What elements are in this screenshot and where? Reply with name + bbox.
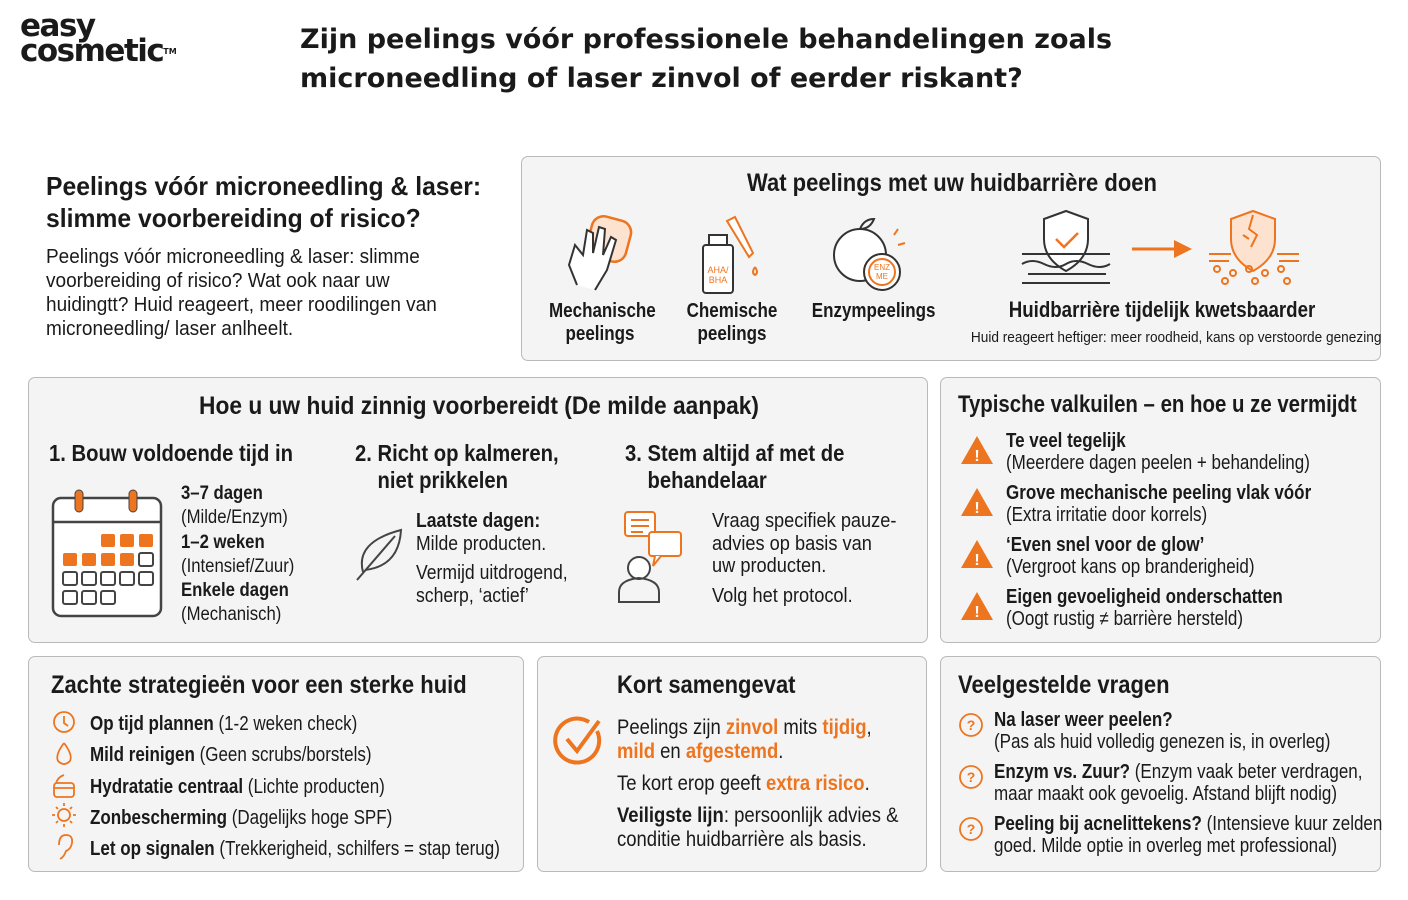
step 2: niet prikkelen [377, 467, 508, 493]
intro heading: slimme voorbereiding of risico? [46, 203, 421, 233]
label chemisch [687, 300, 777, 345]
list: ! [974, 604, 980, 621]
intro text: huidingtt? Huid reageert, meer roodilingen van [46, 294, 437, 316]
step 2 [355, 440, 568, 607]
step 3: behandelaar [647, 467, 767, 493]
label mechanisch: peelings [566, 323, 634, 345]
icon: shield cracked [1209, 210, 1299, 285]
heading: Typische valkuilen – en hoe u ze vermijdt [958, 391, 1357, 418]
intro text: voorbereiding of risico? Wat ook naar uw [46, 270, 390, 292]
list [994, 709, 1330, 753]
intro text: microneedling/ laser anlheelt. [46, 318, 293, 340]
title: microneedling of laser zinvol of eerder riskant? [300, 63, 1023, 94]
panel: voorbereiding [28, 377, 928, 643]
icons [959, 713, 983, 841]
heading: Kort samengevat [617, 671, 796, 699]
logo [20, 8, 177, 69]
text [617, 716, 872, 763]
panel: barrier [521, 156, 1381, 361]
icon: bottle: AHA/ [707, 265, 729, 275]
icon: shield intact [1022, 210, 1110, 284]
icons [52, 711, 76, 860]
step 1 [49, 440, 294, 625]
step 1: 1–2 weken [181, 532, 265, 553]
panel: vragen: maar maakt ook gevoelig. Afstand blijft nodig) [994, 783, 1337, 805]
list [90, 713, 500, 860]
label chemisch: Chemische [687, 300, 777, 322]
label barrier: Huidbarrière tijdelijk kwetsbaarder [1009, 297, 1315, 322]
label enzym: Enzympeelings [812, 300, 936, 322]
list: Eigen gevoeligheid onderschatten [1006, 586, 1283, 608]
logo: cosmeticTM [20, 33, 177, 69]
arrow [1132, 240, 1192, 258]
panel: strategieen [28, 656, 524, 872]
step 2: Milde producten. [416, 533, 546, 555]
list [961, 430, 1311, 630]
step 3: Vraag specifiek pauze- [712, 510, 896, 532]
list: Hydratatie centraal (Lichte producten) [90, 776, 385, 798]
intro heading: Peelings vóór microneedling & laser: [46, 171, 481, 201]
icon: doctor chat [618, 511, 682, 603]
step 2: 2. Richt op kalmeren, [355, 440, 559, 466]
panel: vragen [940, 656, 1381, 872]
step 3 [618, 440, 896, 607]
panel: valkuilen [940, 377, 1381, 643]
list: Zonbescherming (Dagelijks hoge SPF) [90, 807, 392, 829]
panel: samengevat [537, 656, 927, 872]
icon: bottle: BHA [709, 275, 727, 285]
title [300, 24, 1112, 94]
icon: bottle [702, 216, 758, 294]
icon: leaf [356, 528, 402, 581]
text: mild en afgestemd. [617, 740, 783, 763]
heading: Zachte strategieën voor een sterke huid [51, 671, 467, 699]
list: Te veel tegelijk [1006, 430, 1126, 452]
step 1: (Milde/Enzym) [181, 507, 288, 528]
list: Mild reinigen (Geen scrubs/borstels) [90, 744, 372, 766]
title: Zijn peelings vóór professionele behandelingen zoals [300, 24, 1112, 55]
icons: ? [967, 717, 975, 733]
heading: Veelgestelde vragen [958, 671, 1170, 699]
icons: ? [967, 821, 975, 837]
step 1: (Mechanisch) [181, 604, 281, 625]
list: Op tijd plannen (1-2 weken check) [90, 713, 357, 735]
panel: vragen: Enzym vs. Zuur? (Enzym vaak beter verdragen, [994, 761, 1362, 783]
intro heading [46, 171, 481, 233]
list: (Oogt rustig ≠ barrière hersteld) [1006, 608, 1243, 630]
panel: samengevat: Te kort erop geeft extra risico. [617, 772, 870, 795]
icon: fruit enzyme: ME [876, 272, 888, 281]
heading: Hoe u uw huid zinnig voorbereidt (De milde aanpak) [199, 392, 759, 420]
icons: ? [967, 769, 975, 785]
intro text [46, 246, 437, 340]
panel: vragen: Peeling bij acnelittekens? (Intensieve kuur zelden [994, 813, 1382, 835]
step 2: Vermijd uitdrogend, [416, 562, 568, 584]
step 1: 3–7 dagen [181, 483, 263, 504]
list: (Vergroot kans op branderigheid) [1006, 556, 1255, 578]
label mechanisch [549, 300, 656, 345]
step 1: Enkele dagen [181, 580, 289, 601]
icon: sponge hand [568, 215, 632, 290]
subtext barrier: Huid reageert heftiger: meer roodheid, kans op verstoorde genezing [971, 329, 1381, 346]
panel: samengevat: conditie huidbarrière als basis. [617, 828, 867, 851]
list: ! [974, 552, 980, 569]
step 2: Laatste dagen: [416, 510, 540, 532]
logo: easy [20, 8, 95, 44]
step 3: Volg het protocol. [712, 585, 853, 607]
label mechanisch: Mechanische [549, 300, 656, 322]
list: Grove mechanische peeling vlak vóór [1006, 482, 1311, 504]
list: ‘Even snel voor de glow’ [1006, 534, 1204, 556]
panel: samengevat: Veiligste lijn: persoonlijk advies & [617, 804, 898, 827]
step 1: 1. Bouw voldoende tijd in [49, 440, 293, 466]
list: (Meerdere dagen peelen + behandeling) [1006, 452, 1310, 474]
label chemisch: peelings [698, 323, 766, 345]
heading: Wat peelings met uw huidbarrière doen [747, 169, 1157, 197]
list: Let op signalen (Trekkerigheid, schilfers = stap terug) [90, 838, 500, 860]
text: Peelings zijn zinvol mits tijdig, [617, 716, 872, 739]
list: ! [974, 500, 980, 517]
icon: fruit enzyme [833, 218, 906, 291]
intro text: Peelings vóór microneedling & laser: slimme [46, 246, 420, 268]
icon: fruit enzyme: ENZ [874, 263, 890, 272]
step 1: (Intensief/Zuur) [181, 556, 294, 577]
list: Na laser weer peelen? [994, 709, 1173, 731]
list: (Pas als huid volledig genezen is, in overleg) [994, 731, 1330, 753]
icon: check [553, 716, 602, 764]
step 3: advies op basis van [712, 532, 872, 554]
icon: calendar [52, 490, 162, 618]
list: ! [974, 448, 980, 465]
step 3: uw producten. [712, 555, 826, 577]
panel: vragen: goed. Milde optie in overleg met professional) [994, 835, 1337, 857]
list: (Extra irritatie door korrels) [1006, 504, 1207, 526]
step 2: scherp, ‘actief’ [416, 585, 529, 607]
step 3: 3. Stem altijd af met de [625, 440, 844, 466]
